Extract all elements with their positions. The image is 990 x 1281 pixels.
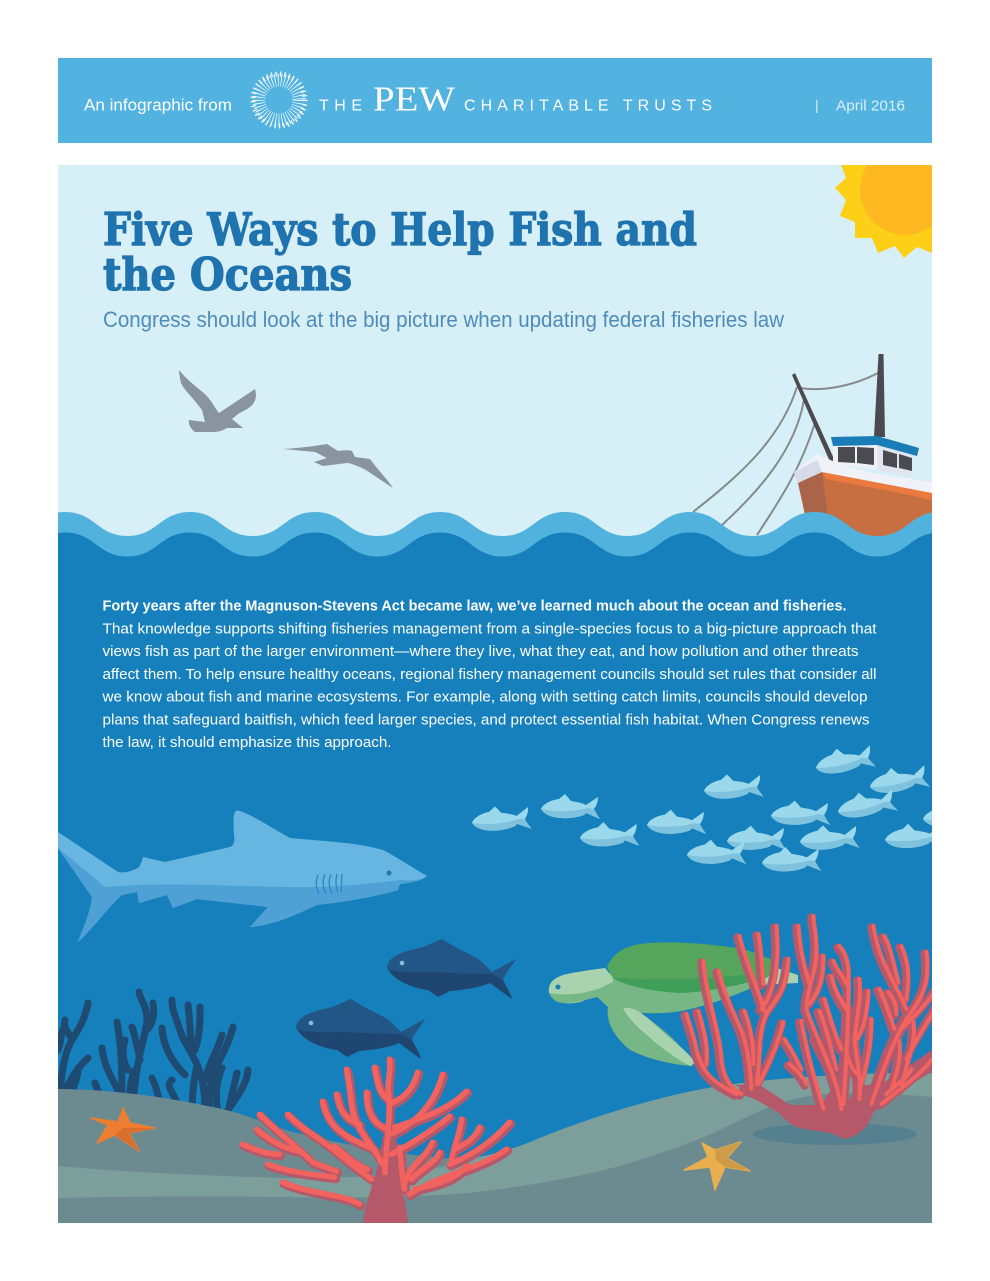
seabed: left hill [58, 1089, 470, 1178]
cabin windows [838, 447, 912, 471]
icon: sun [835, 165, 932, 258]
body paragraph: views fish as part of the larger environment—where they live, what they eat, and how pollution and other threats [102, 644, 858, 660]
bird: gull lower [283, 444, 393, 488]
hull rail [794, 454, 932, 493]
body paragraph: affect them. To help ensure healthy oceans, regional fishery management councils should set rules that consider all [102, 667, 877, 683]
dark fish upper [387, 939, 516, 999]
coral: center [242, 1059, 511, 1223]
cabin [833, 445, 877, 470]
wave: dark ocean surface [58, 532, 932, 570]
title: Five Ways to Help Fish and [103, 203, 697, 256]
turtle head [549, 968, 613, 1003]
starfish orange [91, 1108, 155, 1151]
shark eye [386, 870, 392, 876]
logo wordmark: CHARITABLE TRUSTS [464, 98, 712, 114]
school of small fish [472, 746, 932, 872]
turtle rear flipper [765, 968, 798, 985]
coral: right [684, 916, 936, 1139]
hull [798, 472, 932, 536]
seabed: back hill [58, 1073, 932, 1198]
dark sea plants [58, 992, 248, 1118]
logo wordmark: THE [319, 98, 362, 114]
fishing boat [693, 354, 932, 545]
title: the Oceans [103, 248, 352, 301]
date: April 2016 [836, 98, 905, 114]
dark fish lower [296, 999, 425, 1059]
wave: light [58, 512, 932, 556]
cabin roof [831, 436, 919, 456]
net cables [693, 373, 878, 535]
mast and boom [792, 354, 885, 464]
body paragraph [101, 598, 877, 751]
bird: gull upper [179, 370, 256, 432]
date: | [815, 97, 819, 113]
shark [58, 811, 427, 942]
body paragraph: plans that safeguard baitfish, which feed larger species, and protect essential fish habitat. When Congress renews [102, 712, 870, 728]
subtitle: Congress should look at the big picture when updating federal fisheries law [103, 307, 785, 332]
body paragraph: Forty years after the Magnuson-Stevens Act became law, we’ve learned much about the ocean and fisheries. [102, 598, 846, 614]
header banner [58, 58, 932, 143]
ocean background [58, 620, 932, 1159]
starfish yellow [684, 1142, 750, 1190]
illustrated panel [58, 165, 932, 1223]
text: an infographic from: An infographic from [84, 96, 232, 114]
sky background [58, 165, 932, 555]
logo wordmark [319, 80, 712, 118]
seabed [58, 1073, 932, 1223]
seabed: front ground [58, 1093, 932, 1223]
turtle front flipper [608, 1007, 693, 1066]
title [103, 210, 697, 292]
logo wordmark: PEW [373, 80, 455, 118]
body paragraph: That knowledge supports shifting fisheries management from a single-species focus to a big-picture approach that [102, 622, 877, 638]
coral shadow [753, 1123, 917, 1145]
body paragraph: we know about fish and marine ecosystems. For example, along with setting catch limits, councils should develop [101, 690, 867, 706]
shark gills [316, 874, 342, 894]
turtle shell [607, 942, 777, 993]
body paragraph: the law, it should emphasize this approach. [102, 735, 392, 751]
sea turtle [549, 942, 798, 1066]
icon: Pew sunburst logo [253, 74, 305, 126]
turtle body [584, 972, 766, 1014]
